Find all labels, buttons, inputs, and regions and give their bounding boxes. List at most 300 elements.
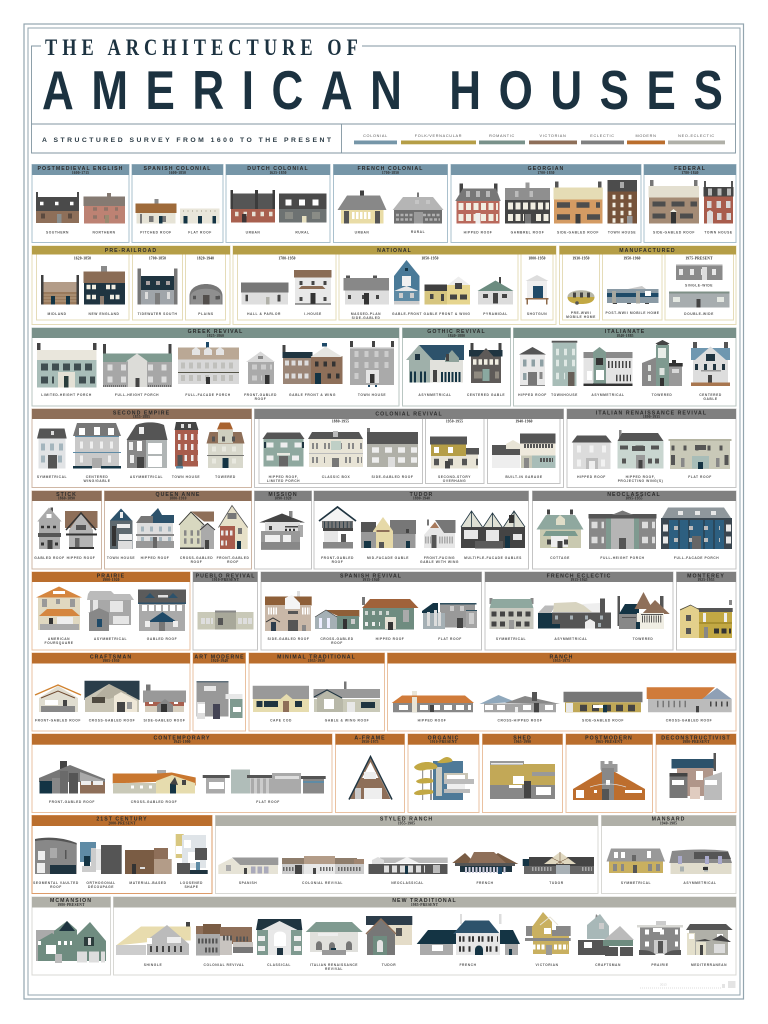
header: organic bbox=[408, 734, 479, 745]
panel: georgian bbox=[451, 164, 641, 242]
header: art moderne: ART MODERNE bbox=[194, 654, 245, 660]
panel: second empire bbox=[32, 409, 252, 488]
caption: gable and wing roof: GABLE & WING ROOF bbox=[325, 718, 369, 722]
caption: hipped roof projecting wings: HIPPED ROOF, bbox=[626, 475, 655, 479]
house: craftsman bbox=[573, 914, 634, 956]
caption: front-gabled roof: FRONT-GABLED bbox=[321, 556, 354, 560]
legend: COLONIAL bbox=[363, 134, 388, 138]
header: a-frame bbox=[336, 734, 404, 745]
caption: french: FRENCH bbox=[476, 881, 494, 885]
panel: minimal traditional bbox=[249, 653, 384, 731]
header: contemporary: CONTEMPORARY bbox=[153, 735, 211, 741]
caption: towered: TOWERED bbox=[633, 637, 653, 641]
panel: national bbox=[233, 246, 556, 324]
house: spanish bbox=[218, 858, 278, 874]
house: asymmetrical bbox=[126, 422, 168, 468]
header: organic: ORGANIC bbox=[428, 735, 459, 741]
header: dutch colonial bbox=[226, 164, 330, 175]
house: side-gabled roof bbox=[554, 182, 603, 224]
header: deconstructivist: DECONSTRUCTIVIST bbox=[661, 735, 731, 741]
header: 21st century: 2000-PRESENT bbox=[108, 822, 136, 826]
caption: hipped roof: HIPPED ROOF bbox=[67, 556, 95, 560]
header: second empire bbox=[32, 409, 252, 419]
header: mission bbox=[254, 491, 312, 501]
panel: french colonial bbox=[334, 164, 448, 242]
header: stick: STICK bbox=[56, 492, 77, 498]
header: spanish colonial bbox=[132, 164, 223, 175]
caption: pyramidal: PYRAMIDAL bbox=[483, 312, 508, 316]
header: french colonial: FRENCH COLONIAL bbox=[358, 166, 423, 172]
house: organic bbox=[414, 757, 474, 800]
header: gothic revival: 1840-1880 bbox=[448, 334, 465, 338]
caption: asymmetrical: ASYMMETRICAL bbox=[683, 881, 717, 885]
header: a-frame: 1950-1975 bbox=[361, 740, 379, 744]
house: loosened shape bbox=[176, 834, 208, 874]
header: national: NATIONAL bbox=[377, 248, 412, 254]
panel: queen anne bbox=[104, 491, 252, 569]
panel: gothic revival bbox=[402, 328, 510, 406]
header: organic: 1910-PRESENT bbox=[430, 740, 458, 744]
header: postmodern: 1965-PRESENT bbox=[595, 740, 623, 744]
house: italian renaissance revival bbox=[306, 922, 363, 955]
header: postmedieval english: POSTMEDIEVAL ENGLISH bbox=[38, 166, 123, 172]
header: federal: FEDERAL bbox=[674, 166, 706, 172]
header: georgian bbox=[451, 164, 641, 175]
caption: gable-front: GABLE-FRONT bbox=[392, 312, 422, 316]
caption: flat roof: FLAT ROOF bbox=[688, 475, 712, 479]
panel: spanish colonial bbox=[132, 164, 223, 242]
panel: pre-railroad bbox=[32, 246, 230, 324]
header: mcmansion: 1980-PRESENT bbox=[57, 903, 85, 907]
house: urban bbox=[338, 190, 386, 224]
header: pueblo revival: PUEBLO REVIVAL bbox=[196, 573, 255, 579]
header: prairie: PRAIRIE bbox=[97, 573, 125, 579]
house: cross-gabled roof bbox=[84, 681, 140, 712]
caption: urban: URBAN bbox=[355, 230, 369, 234]
header: craftsman: 1905-1930 bbox=[102, 659, 120, 663]
caption: town house: TOWN HOUSE bbox=[704, 230, 733, 234]
caption: asymmetrical: ASYMMETRICAL bbox=[94, 637, 127, 641]
legend: VICTORIAN bbox=[540, 134, 566, 138]
caption: victorian: VICTORIAN bbox=[535, 963, 559, 967]
date: pre-railroad 2: 1700-1850 bbox=[149, 256, 166, 260]
house: new england bbox=[84, 266, 125, 304]
header: craftsman bbox=[32, 653, 190, 664]
header: mansard: 1940-1985 bbox=[660, 822, 677, 826]
title: the architecture of: THE ARCHITECTURE OF bbox=[45, 34, 358, 61]
signature and credit mark bbox=[640, 981, 736, 988]
caption line: projecting wings: PROJECTING WING(S) bbox=[618, 479, 663, 483]
house: multiple-facade gables bbox=[460, 511, 525, 548]
header: postmodern: POSTMODERN bbox=[585, 735, 633, 741]
caption: classical: CLASSICAL bbox=[267, 963, 291, 967]
house: hipped roof bbox=[572, 436, 612, 469]
caption line: roof: ROOF bbox=[227, 560, 239, 564]
house: tidewater south bbox=[138, 268, 178, 304]
caption: mediterranean: MEDITERRANEAN bbox=[691, 963, 727, 967]
caption: limited-height porch: LIMITED-HEIGHT PORCH bbox=[41, 393, 92, 397]
caption: double-wide: DOUBLE-WIDE bbox=[684, 312, 714, 316]
header: ranch: 1935-1975 bbox=[553, 659, 570, 663]
caption: cottage: COTTAGE bbox=[550, 556, 570, 560]
house: cross-hipped roof bbox=[480, 692, 560, 712]
panel: postmedieval english bbox=[32, 164, 129, 242]
caption: material-based: MATERIAL-BASED bbox=[129, 881, 167, 885]
header: 21st century bbox=[32, 816, 212, 826]
header: neoclassical bbox=[532, 491, 736, 501]
header: georgian: 1700-1830 bbox=[537, 171, 555, 175]
house: shotgun bbox=[526, 275, 548, 304]
title: american houses: AMERICAN HOUSES bbox=[42, 59, 723, 121]
caption: pitched roof: PITCHED ROOF bbox=[140, 230, 172, 234]
header: colonial revival bbox=[254, 409, 564, 419]
caption: midland: MIDLAND bbox=[47, 312, 67, 316]
house: front-facing gable with wing bbox=[424, 520, 456, 548]
house: post-wwii mobile home bbox=[607, 286, 658, 304]
panel: art moderne bbox=[193, 653, 246, 731]
caption: cross-gabled roof: CROSS-GABLED bbox=[320, 637, 354, 641]
house: towered bbox=[206, 422, 244, 468]
caption: town house: TOWN HOUSE bbox=[358, 393, 386, 397]
header: shed: 1965-1990 bbox=[514, 740, 531, 744]
house: neoclassical bbox=[368, 857, 448, 874]
caption: second-story overhang: SECOND-STORY bbox=[438, 475, 471, 479]
header: postmodern bbox=[566, 734, 652, 745]
header: spanish revival: 1915-1940 bbox=[362, 578, 380, 582]
caption: hipped roof: HIPPED ROOF bbox=[577, 475, 606, 479]
header: french eclectic bbox=[485, 572, 673, 582]
header: queen anne: QUEEN ANNE bbox=[156, 492, 200, 498]
date: colonial revival 3: 1940-1960 bbox=[515, 420, 533, 424]
house: colonial revival bbox=[282, 856, 364, 874]
house: cape cod bbox=[253, 686, 309, 712]
header: national bbox=[233, 246, 556, 254]
header: pueblo revival: 1910-PRESENT bbox=[212, 578, 240, 582]
house: pitched roof bbox=[136, 199, 176, 224]
header: gothic revival: GOTHIC REVIVAL bbox=[427, 329, 486, 335]
house: side-gabled roof bbox=[564, 692, 642, 712]
caption: townhouse: TOWNHOUSE bbox=[551, 393, 578, 397]
panel: greek revival bbox=[32, 328, 399, 406]
house: northern bbox=[84, 193, 125, 224]
caption: asymmetrical: ASYMMETRICAL bbox=[554, 637, 588, 641]
house: hipped roof bbox=[392, 691, 474, 712]
caption: town house: TOWN HOUSE bbox=[608, 230, 636, 234]
caption: urban: URBAN bbox=[246, 230, 260, 234]
panel: italian renaissance revival bbox=[567, 409, 736, 488]
header: monterey: 1925-1955 bbox=[697, 578, 715, 582]
house: side-gabled roof bbox=[143, 684, 186, 712]
caption: front-gabled roof: FRONT-GABLED ROOF bbox=[49, 800, 95, 804]
caption: southern: SOUTHERN bbox=[46, 230, 69, 234]
house: gable front and wing bbox=[282, 343, 342, 384]
house: town house bbox=[704, 181, 734, 224]
house: towered bbox=[642, 340, 683, 386]
caption line: roof: ROOF bbox=[50, 885, 62, 889]
house: art moderne bbox=[196, 681, 242, 719]
panel: monterey bbox=[676, 572, 736, 650]
caption: hipped roof: HIPPED ROOF bbox=[518, 393, 547, 397]
title block bbox=[32, 34, 736, 153]
caption: cross-gabled roof: CROSS-GABLED ROOF bbox=[89, 718, 135, 722]
house: plains bbox=[190, 284, 222, 304]
panel: craftsman bbox=[32, 653, 190, 731]
house: town house bbox=[608, 180, 637, 224]
header: second empire: SECOND EMPIRE bbox=[113, 410, 170, 416]
header: federal bbox=[644, 164, 736, 175]
caption: hipped roof: HIPPED ROOF bbox=[464, 230, 492, 234]
header: a-frame: A-FRAME bbox=[354, 735, 386, 741]
header: mission: MISSION bbox=[268, 492, 298, 498]
house: full-height porch bbox=[103, 344, 172, 387]
date: pre-railroad 3: 1820-1940 bbox=[197, 256, 214, 260]
caption: cape cod: CAPE COD bbox=[270, 718, 292, 722]
house: gable front and wing bbox=[424, 276, 470, 304]
header: styled ranch bbox=[216, 816, 598, 826]
house: classic box bbox=[308, 431, 363, 467]
house: french bbox=[417, 914, 520, 955]
legend: FOLK/VERNACULAR bbox=[415, 134, 462, 138]
panel: organic bbox=[408, 734, 479, 812]
header: mansard bbox=[602, 816, 736, 826]
caption: front-gabled roof: FRONT-GABLED bbox=[217, 556, 249, 560]
caption: massed-plan side-gabled: MASSED-PLAN bbox=[351, 312, 381, 316]
house: flat roof bbox=[422, 603, 477, 629]
house: flat roof bbox=[668, 439, 732, 469]
caption: cross-gabled roof: CROSS-GABLED ROOF bbox=[666, 718, 712, 722]
house: town house bbox=[350, 341, 394, 387]
panel: colonial revival bbox=[254, 409, 564, 488]
house: mcmansion bbox=[36, 921, 106, 963]
header: styled ranch: STYLED RANCH bbox=[380, 817, 433, 823]
panel: tudor bbox=[314, 491, 528, 569]
caption: cross-hipped roof: CROSS-HIPPED ROOF bbox=[498, 718, 542, 722]
house: second-story overhang bbox=[430, 436, 479, 468]
panel: mission bbox=[254, 491, 312, 569]
caption line: mobile home: MOBILE HOME bbox=[566, 315, 596, 319]
header: contemporary bbox=[32, 734, 332, 745]
caption line: wing/gable: WING/GABLE bbox=[84, 479, 111, 483]
caption: post-wwii mobile home: POST-WWII MOBILE HOME bbox=[605, 311, 660, 315]
caption: side-gabled roof: SIDE-GABLED ROOF bbox=[582, 718, 624, 722]
house: full-facade porch bbox=[661, 508, 732, 549]
header: stick bbox=[32, 491, 102, 501]
header: neoclassical: 1895-1955 bbox=[625, 497, 643, 501]
header: ranch bbox=[388, 653, 736, 664]
house: segmental vaulted roof bbox=[35, 838, 77, 874]
caption: orthogonal decoupage: ORTHOGONAL bbox=[86, 881, 116, 885]
caption line: roof: ROOF bbox=[332, 560, 343, 564]
date: national 1: 1780-1950 bbox=[278, 256, 296, 260]
caption: single-wide: SINGLE-WIDE bbox=[685, 284, 713, 288]
house: urban bbox=[230, 190, 275, 222]
panel: postmodern bbox=[566, 734, 652, 812]
header: deconstructivist bbox=[656, 734, 736, 745]
caption: front-facing gable with wing: FRONT-FACING bbox=[424, 556, 455, 560]
caption: segmental vaulted roof: SEGMENTAL VAULTED bbox=[33, 881, 79, 885]
house: town house bbox=[174, 422, 198, 468]
caption: pre-wwii mobile home: PRE-WWII bbox=[571, 311, 591, 315]
caption: neoclassical: NEOCLASSICAL bbox=[391, 881, 424, 885]
house: townhouse bbox=[552, 341, 577, 386]
caption: full-height porch: FULL-HEIGHT PORCH bbox=[115, 393, 159, 397]
caption: craftsman: CRAFTSMAN bbox=[595, 963, 621, 967]
caption: side-gabled roof: SIDE-GABLED ROOF bbox=[372, 475, 413, 479]
house: town house bbox=[110, 508, 132, 549]
header: french colonial: 1700-1850 bbox=[382, 171, 399, 175]
house: gambrel roof bbox=[505, 182, 550, 224]
house: hipped roof bbox=[519, 347, 546, 386]
caption line: gable: GABLE bbox=[703, 397, 718, 401]
house: gable-front bbox=[394, 260, 420, 304]
header: spanish revival: SPANISH REVIVAL bbox=[340, 573, 402, 579]
caption: new england: NEW ENGLAND bbox=[89, 312, 120, 316]
caption: towered: TOWERED bbox=[652, 393, 672, 397]
caption line: decoupage: DÉCOUPAGE bbox=[88, 884, 114, 889]
house: american foursquare bbox=[36, 586, 82, 630]
header: new traditional bbox=[114, 897, 736, 908]
caption: i-house: I-HOUSE bbox=[304, 312, 322, 316]
legend: NEO-ECLECTIC bbox=[678, 134, 715, 138]
header: greek revival: 1825-1860 bbox=[207, 334, 224, 338]
house: cross-gabled roof bbox=[315, 610, 359, 629]
header: greek revival bbox=[32, 328, 399, 338]
caption: gabled roof: GABLED ROOF bbox=[34, 556, 65, 560]
house: side-gabled roof bbox=[265, 591, 312, 631]
caption: gambrel roof: GAMBREL ROOF bbox=[511, 230, 544, 234]
caption: colonial revival: COLONIAL REVIVAL bbox=[302, 881, 343, 885]
header: queen anne bbox=[104, 491, 252, 501]
house: i-house bbox=[294, 270, 332, 304]
legend: MODERN bbox=[635, 134, 657, 138]
header: monterey: MONTEREY bbox=[687, 573, 725, 579]
house: deconstructivist bbox=[670, 753, 722, 800]
caption: mid-facade gable: MID-FACADE GABLE bbox=[367, 556, 409, 560]
caption: hall and parlor: HALL & PARLOR bbox=[247, 312, 281, 316]
panel: italianate bbox=[514, 328, 736, 406]
house: shed bbox=[490, 761, 555, 799]
header: art moderne bbox=[193, 653, 246, 664]
house: french bbox=[452, 852, 518, 874]
caption: centered gable: CENTERED bbox=[699, 393, 722, 397]
panel: pueblo revival bbox=[193, 572, 258, 650]
caption: side-gabled roof: SIDE-GABLED ROOF bbox=[557, 230, 599, 234]
header: postmedieval english: 1600-1715 bbox=[72, 171, 89, 175]
panel: a-frame bbox=[336, 734, 404, 812]
house: front-gabled roof bbox=[39, 761, 105, 794]
header: manufactured: MANUFACTURED bbox=[619, 248, 676, 254]
header: mansard: MANSARD bbox=[652, 817, 685, 823]
header: ranch: RANCH bbox=[550, 654, 573, 660]
header: tudor: TUDOR bbox=[410, 492, 433, 498]
header: art moderne: 1920-1940 bbox=[211, 659, 228, 663]
house: centered wing/gable bbox=[73, 423, 121, 468]
date: manufactured 3: 1975-PRESENT bbox=[685, 256, 713, 260]
house: hall and parlor bbox=[241, 282, 288, 304]
caption: multiple-facade gables: MULTIPLE-FACADE GABLES bbox=[464, 556, 522, 560]
caption: symmetrical: SYMMETRICAL bbox=[621, 881, 651, 885]
header: neoclassical: NEOCLASSICAL bbox=[607, 492, 661, 498]
header: greek revival: GREEK REVIVAL bbox=[188, 329, 243, 335]
caption: hipped roof: HIPPED ROOF bbox=[376, 637, 404, 641]
header: new traditional: NEW TRADITIONAL bbox=[392, 898, 457, 904]
house: hipped roof bbox=[65, 511, 98, 549]
header: craftsman: CRAFTSMAN bbox=[90, 654, 132, 660]
caption line: foursquare: FOURSQUARE bbox=[45, 641, 74, 645]
house: southern bbox=[36, 192, 79, 223]
caption: flat roof: FLAT ROOF bbox=[256, 800, 280, 804]
caption: centered wing/gable: CENTERED bbox=[86, 475, 108, 479]
header: colonial revival: COLONIAL REVIVAL bbox=[375, 412, 443, 418]
header: georgian: GEORGIAN bbox=[528, 166, 564, 172]
caption: italian renaissance revival: ITALIAN RENAISSANCE bbox=[310, 963, 358, 967]
caption line: overhang: OVERHANG bbox=[443, 479, 466, 483]
panel: dutch colonial bbox=[226, 164, 330, 242]
caption: american foursquare: AMERICAN bbox=[48, 637, 70, 641]
house: asymmetrical bbox=[669, 850, 732, 874]
caption: flat roof: FLAT ROOF bbox=[188, 230, 212, 234]
house: pueblo bbox=[198, 610, 254, 630]
caption: shingle: SHINGLE bbox=[144, 963, 162, 967]
caption: gable front and wing: GABLE FRONT & WING bbox=[424, 312, 470, 316]
caption: cross-gabled roof: CROSS-GABLED bbox=[180, 556, 213, 560]
caption: plains: PLAINS bbox=[198, 312, 214, 316]
header: italian renaissance revival bbox=[567, 409, 736, 419]
caption: gabled roof: GABLED ROOF bbox=[147, 637, 177, 641]
header: postmedieval english bbox=[32, 164, 129, 175]
house: hipped roof bbox=[136, 508, 174, 548]
house: full-height porch bbox=[588, 510, 656, 549]
caption: gable front and wing: GABLE FRONT & WING bbox=[289, 393, 336, 397]
caption: centered gable: CENTERED GABLE bbox=[467, 393, 505, 397]
house: massed-plan side-gabled bbox=[344, 276, 389, 304]
caption: colonial revival: COLONIAL REVIVAL bbox=[204, 963, 244, 967]
caption: side-gabled roof: SIDE-GABLED ROOF bbox=[653, 230, 695, 234]
panel: ranch bbox=[388, 653, 736, 731]
house: side-gabled roof bbox=[648, 180, 699, 224]
house: cross-gabled roof bbox=[179, 511, 215, 549]
house: hipped roof bbox=[455, 184, 501, 224]
caption: tudor: TUDOR bbox=[382, 963, 396, 967]
caption: tidewater south: TIDEWATER SOUTH bbox=[138, 312, 178, 316]
header: queen anne: 1880-1910 bbox=[169, 497, 187, 501]
caption: full-facade porch: FULL-FACADE PORCH bbox=[185, 393, 231, 397]
header: italian renaissance revival: 1890-1935 bbox=[643, 415, 660, 419]
caption line: shape: SHAPE bbox=[184, 885, 199, 889]
header: deconstructivist: 1980-PRESENT bbox=[682, 740, 710, 744]
header: italianate bbox=[514, 328, 736, 338]
caption: town house: TOWN HOUSE bbox=[172, 475, 200, 479]
header: pre-railroad: PRE-RAILROAD bbox=[105, 248, 157, 254]
panel: deconstructivist bbox=[656, 734, 736, 812]
header: french eclectic: FRENCH ECLECTIC bbox=[547, 573, 611, 579]
house: cross-gabled roof bbox=[113, 770, 196, 794]
house: material-based bbox=[125, 848, 172, 874]
house: pre-wwii mobile home bbox=[568, 290, 594, 305]
caption: built-in garage: BUILT-IN GARAGE bbox=[505, 475, 543, 479]
caption: classic box: CLASSIC BOX bbox=[322, 475, 351, 479]
caption line: gable with wing: GABLE WITH WING bbox=[420, 560, 459, 564]
header: spanish colonial: 1600-1850 bbox=[169, 171, 186, 175]
header: prairie bbox=[32, 572, 190, 582]
house: rural bbox=[393, 192, 444, 224]
house: tudor bbox=[523, 852, 594, 874]
header: gothic revival bbox=[402, 328, 510, 338]
signature and credit mark: 2013 bbox=[660, 982, 667, 986]
house: victorian bbox=[525, 912, 571, 955]
caption: hipped roof: HIPPED ROOF bbox=[141, 556, 169, 560]
header: prairie: 1900-1920 bbox=[102, 578, 120, 582]
